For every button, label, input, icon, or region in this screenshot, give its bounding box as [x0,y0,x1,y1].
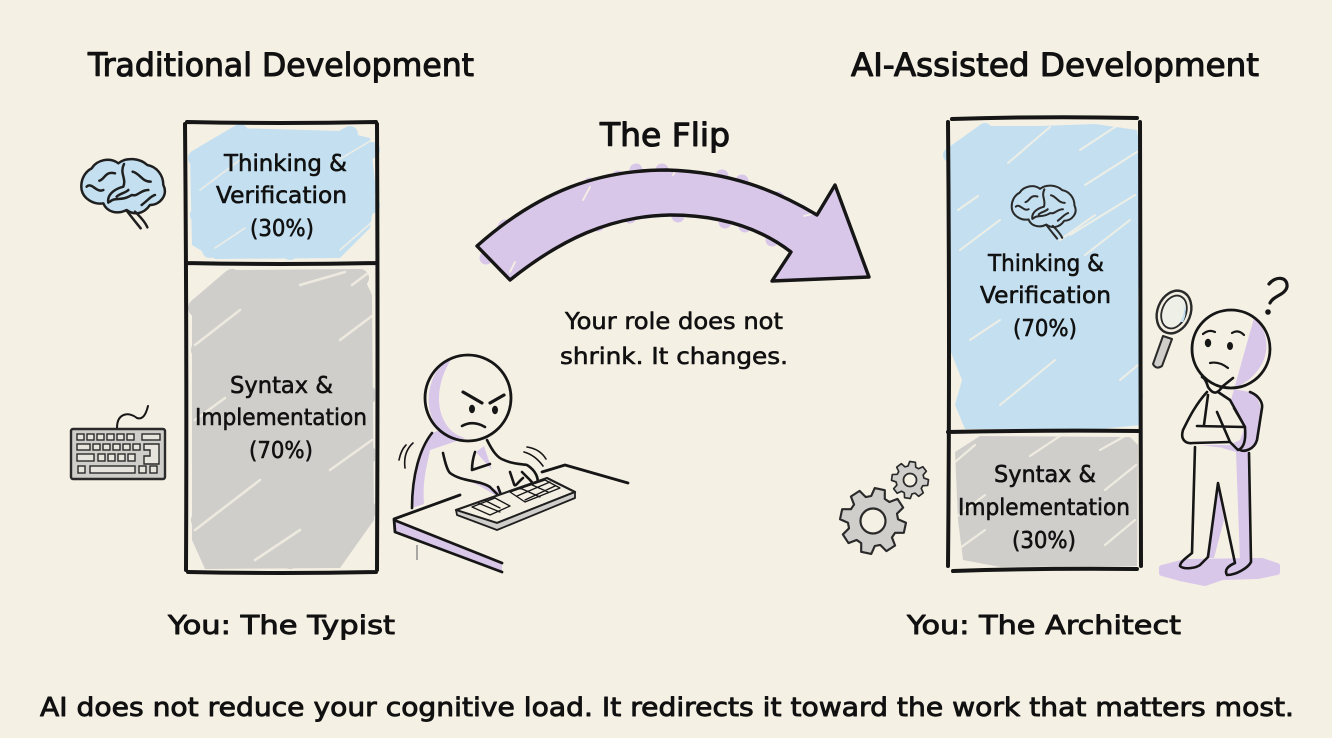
heading: traditional development: Traditional Development [87,46,474,84]
icon: gears [834,459,931,560]
desk [394,465,628,572]
segment: thinking fill [190,128,376,259]
label: thinking and verification 30%: (30%) [250,216,314,242]
brain icon in bar [1012,186,1076,239]
arrow: the flip [477,167,869,281]
panel: traditional stacked bar [185,122,378,573]
angry face [462,392,504,427]
thinking face [1203,331,1244,368]
label: thinking and verification 70% [980,251,1111,342]
segment: thinking fill [950,112,1142,429]
label: syntax and implementation 70% [195,373,367,464]
icon: question mark [1265,278,1287,315]
label: thinking and verification 30%: Thinking & [223,151,347,177]
head [425,355,511,441]
label: syntax and implementation 70%: Syntax & [230,373,333,399]
label: syntax and implementation 30%: (30%) [1012,528,1076,554]
head [1192,310,1270,388]
label: syntax and implementation 30%: Implementation [958,495,1130,521]
panel: AI-assisted stacked bar [948,112,1142,571]
arrow outline [477,170,869,281]
role label: architect: You: The Architect [906,611,1181,641]
label: thinking and verification 30%: Verification [216,183,347,209]
shading [1200,318,1266,562]
motion marks [399,443,546,468]
label: syntax and implementation 70%: Implementation [195,405,367,431]
icon: magnifying glass [1150,285,1198,368]
segment: syntax fill [955,436,1138,567]
icon: keyboard [71,406,165,479]
label: thinking and verification 30% [216,151,347,242]
crossed arm and hand [1197,377,1245,450]
keyboard [456,478,575,523]
body [1180,392,1262,575]
takeaway: AI does not reduce your cognitive load. It redirects it toward the work that matters most. [40,693,1294,723]
ground shadow [1162,561,1277,583]
heading: AI-assisted development: AI-Assisted Development [851,46,1259,84]
label: thinking and verification 70%: Verification [980,283,1111,309]
caption: role: shrink. It changes. [560,344,788,370]
shading [394,358,503,572]
role label: typist: You: The Typist [167,611,395,641]
caption: role [560,309,788,370]
character: architect [1162,310,1277,583]
label: syntax and implementation 30%: Syntax & [994,462,1096,488]
title: the flip: The Flip [599,116,730,154]
segment: syntax fill [188,269,374,569]
bar outline [948,117,1141,571]
label: syntax and implementation 30% [958,462,1130,554]
label: syntax and implementation 70%: (70%) [249,438,313,464]
icon: brain [81,159,165,228]
bar outline [185,122,378,573]
body and arms [412,433,538,508]
caption: role: Your role does not [564,309,783,335]
label: thinking and verification 70%: (70%) [1013,316,1077,342]
character: typist [394,355,628,572]
label: thinking and verification 70%: Thinking & [987,251,1104,277]
